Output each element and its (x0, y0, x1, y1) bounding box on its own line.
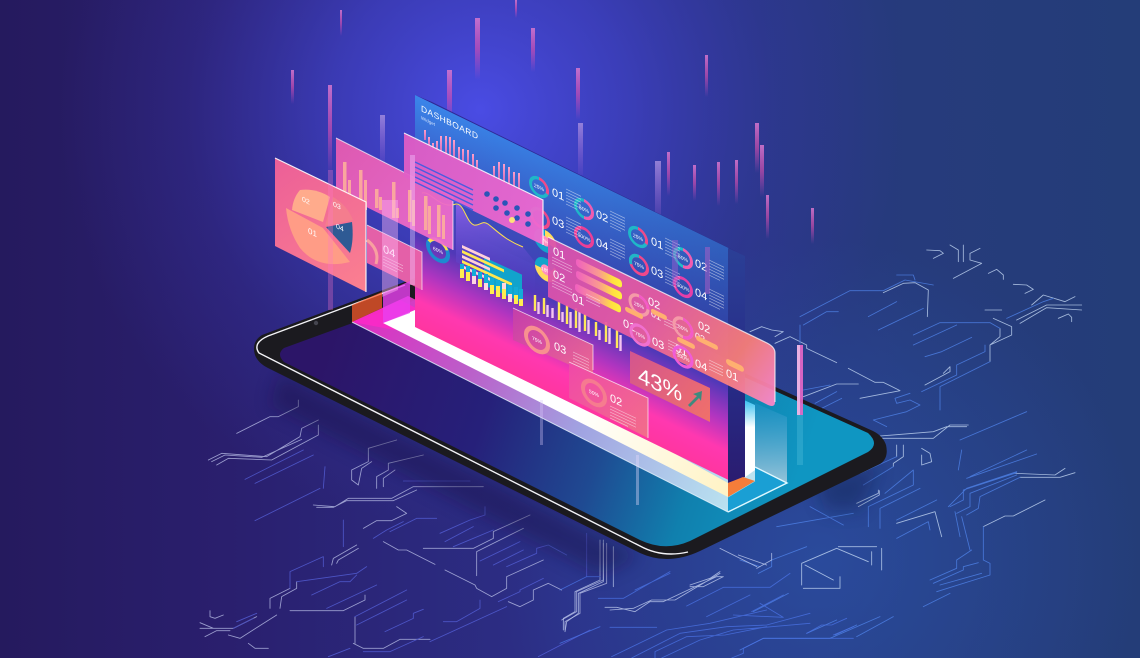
horizontal stacked chart (462, 245, 522, 303)
card donuts: 25% (634, 301, 644, 311)
pie slice 01 (286, 208, 350, 264)
card numbers: 01 (623, 317, 635, 335)
translucent column: magenta (383, 281, 410, 323)
card numbers: 04 (695, 357, 708, 375)
circuit traces: right side (740, 245, 1082, 650)
card: 50% (569, 362, 648, 438)
orange floor (728, 477, 755, 497)
donut 50% second (674, 245, 692, 271)
card numbers (553, 245, 738, 385)
translucent column: orange (352, 292, 382, 322)
card number: 03 (554, 340, 566, 358)
card: 43% stat (630, 351, 710, 422)
card donut: 75% (532, 336, 542, 346)
card text lines (552, 257, 723, 376)
card text lines (610, 406, 636, 430)
donut 75% (531, 205, 548, 231)
card pills (575, 258, 622, 313)
dashboard title: DASHBOARD (421, 103, 478, 142)
hexagon dots (484, 191, 531, 227)
card text lines (383, 256, 403, 275)
card numbers: 03 (652, 335, 664, 353)
donut 25% second: 25% (633, 233, 643, 243)
dashboard numbered list (552, 186, 724, 311)
donut 50% (576, 196, 592, 222)
glass floor glow on screen (352, 296, 786, 512)
card: pie chart (275, 158, 366, 292)
donut 50%: 50% (579, 205, 589, 215)
phone body (254, 254, 887, 559)
pie labels: 02 (302, 194, 310, 207)
phone shadow (270, 372, 880, 575)
card donuts (630, 292, 692, 370)
translucent beam: center (410, 155, 415, 285)
donut 100% second (674, 274, 692, 300)
card numbers: 02 (553, 268, 565, 286)
pie slice 04 (326, 222, 353, 253)
vertical stacked chart (462, 264, 521, 306)
card number: 02 (610, 392, 622, 410)
small bar chart (535, 295, 620, 351)
donut 50% second: 50% (678, 254, 688, 264)
white light column (744, 400, 755, 478)
slider highlight (509, 217, 515, 223)
donut 60% on main: 60% (433, 246, 443, 256)
white light band (383, 310, 728, 497)
card: 04 (367, 225, 422, 290)
pie labels (302, 194, 344, 239)
glowing tray (728, 467, 787, 512)
donut 25% second (630, 224, 647, 250)
card numbers: 01 (675, 342, 687, 360)
card small pills (625, 306, 744, 373)
floating light beams (291, 0, 814, 244)
donut 75% second: 75% (634, 261, 644, 271)
translucent column: white pink (382, 200, 398, 297)
card numbers: 01 (651, 308, 661, 324)
dashboard numbered list: 02 (596, 208, 608, 226)
circuit traces: lower left (200, 400, 607, 657)
lower pillars through dashboard (540, 240, 710, 505)
card donuts: 75% (635, 331, 645, 341)
card: stripes and hexagons (404, 133, 543, 245)
card: bar chart (336, 138, 453, 250)
panel: dashboard main (415, 95, 755, 497)
donut pair on main: 18% (541, 266, 551, 276)
donut 25%: 25% (534, 183, 544, 193)
phone camera (314, 321, 318, 325)
card bars (343, 162, 445, 239)
card donuts: 100% (677, 352, 690, 364)
donut on main upper (534, 225, 556, 258)
donut 100%: 100% (578, 232, 591, 244)
phone edge highlight (257, 285, 688, 554)
stripe chart (415, 162, 473, 210)
card numbers: 01 (553, 245, 565, 263)
donut 100% second: 100% (677, 282, 690, 294)
dashboard subtitle: Widget (421, 115, 436, 128)
card numbers: 02 (698, 319, 710, 337)
phone screen (280, 268, 874, 546)
card partial donut (367, 240, 377, 264)
donut pair on main (535, 253, 557, 286)
dashboard numbered list: 04 (695, 286, 708, 304)
card donut: 50% (589, 389, 599, 399)
top bar chart (424, 130, 520, 190)
pie labels: 03 (333, 199, 341, 212)
area chart (422, 193, 535, 300)
card text lines (573, 352, 589, 369)
card number 04: 04 (383, 243, 396, 261)
donut 75% second (630, 252, 648, 278)
dashboard numbered list: 02 (695, 257, 707, 275)
card numbers: 02 (695, 330, 705, 346)
translucent beam: front right (797, 345, 803, 465)
back glass wall (755, 403, 787, 483)
donut 60% on main (428, 235, 448, 265)
dashboard numbered list: 03 (651, 264, 663, 282)
circuit traces: bottom middle (560, 540, 853, 658)
pie slice 02 (292, 190, 330, 222)
dashboard numbered list: 04 (596, 236, 609, 254)
card numbers: 01 (572, 291, 584, 309)
donut 100% (576, 224, 592, 250)
dashboard numbered list: 01 (552, 186, 564, 204)
dashboard numbered list: 03 (552, 214, 564, 232)
donut on main upper: 7% (541, 237, 549, 247)
stat value: 43% (638, 362, 682, 407)
up arrow (688, 391, 702, 407)
card donuts: 50% (678, 324, 688, 334)
pie labels: 01 (308, 225, 317, 239)
pie slice 03 (325, 197, 353, 226)
donut 25% (530, 174, 548, 200)
dashboard side edge (728, 248, 745, 483)
pie labels: 04 (336, 221, 344, 234)
card: 75% (513, 308, 593, 375)
card: long pink panel (548, 237, 775, 406)
card numbers: 02 (648, 295, 660, 313)
dashboard numbered list: 01 (651, 235, 663, 253)
card numbers: 01 (726, 367, 738, 385)
translucent beam: left (328, 170, 333, 310)
